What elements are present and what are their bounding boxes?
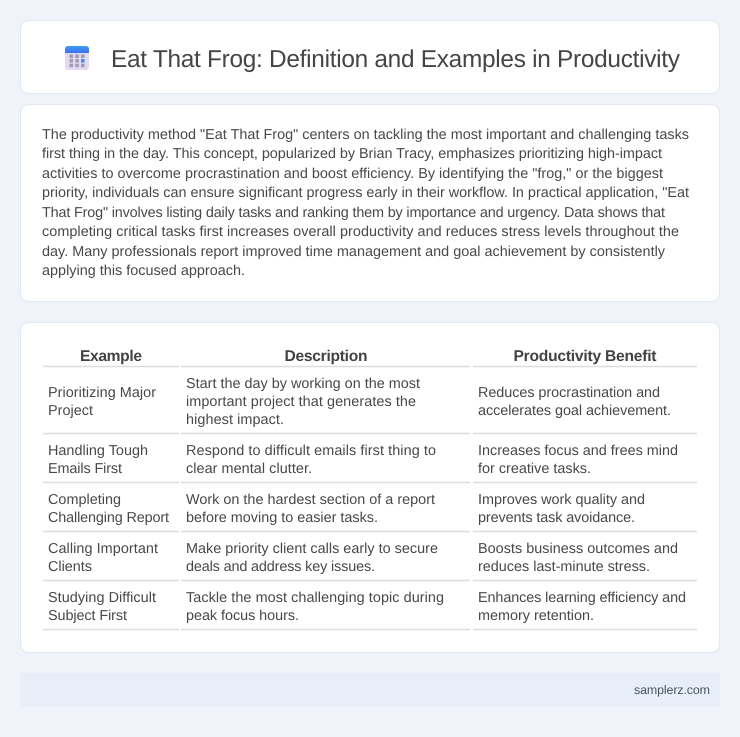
panel: intro text: That Frog" involves listing daily tasks and ranking them by importance and urgency. Data shows that (42, 205, 665, 221)
row: Prioritizing Major Project: Start the day by working on the most (186, 376, 420, 392)
panel: intro text: applying this focused approach. (42, 263, 245, 279)
panel: intro text: priority, individuals can ensure significant progress early in their workflow. In practical application, "Eat (42, 185, 689, 201)
row: Calling Important Clients: reduces last-minute stress. (478, 559, 650, 575)
panel: intro text (20, 104, 720, 302)
row: Completing Challenging Report (48, 492, 645, 526)
row: Prioritizing Major Project: Reduces procrastination and (478, 385, 660, 401)
panel: examples table (20, 322, 720, 652)
footer bar: samplerz.com (634, 683, 710, 697)
row: Prioritizing Major Project: important project that generates the (186, 394, 416, 410)
row: Calling Important Clients: Clients (48, 559, 92, 575)
row: Studying Difficult Subject First: Subject First (48, 608, 127, 624)
row: Handling Tough Emails First: Emails First (48, 461, 122, 477)
header panel (20, 20, 720, 94)
row: Calling Important Clients: Make priority client calls early to secure (186, 541, 438, 557)
row: Calling Important Clients: deals and address key issues. (186, 559, 375, 575)
row: Prioritizing Major Project: highest impact. (186, 412, 284, 428)
row: Completing Challenging Report: Completing (48, 492, 121, 508)
row: Completing Challenging Report: Work on the hardest section of a report (186, 492, 435, 508)
table header: Productivity Benefit (514, 348, 656, 365)
row: Completing Challenging Report: before moving to easier tasks. (186, 510, 378, 526)
panel: intro text: activities to overcome procrastination and boost efficiency. By identifying the "frog," or the biggest (42, 166, 663, 182)
footer bar (20, 673, 720, 707)
table header (80, 348, 656, 365)
icon: calendar (65, 46, 89, 70)
row: Studying Difficult Subject First: Enhances learning efficiency and (478, 590, 686, 606)
row: Prioritizing Major Project: Project (48, 403, 93, 419)
row: Handling Tough Emails First (48, 443, 678, 477)
panel: intro text: The productivity method "Eat That Frog" centers on tackling the most important and challenging tasks (42, 127, 689, 143)
row: Calling Important Clients (48, 541, 678, 575)
row: Completing Challenging Report: prevents task avoidance. (478, 510, 635, 526)
panel: intro text: first thing in the day. This concept, popularized by Brian Tracy, emphasizes prioritizing high-impact (42, 146, 662, 162)
row: Handling Tough Emails First: Handling Tough (48, 443, 148, 459)
row: Studying Difficult Subject First (48, 590, 686, 624)
row: Calling Important Clients: Calling Important (48, 541, 158, 557)
row: Completing Challenging Report: Improves work quality and (478, 492, 645, 508)
row: Prioritizing Major Project: Prioritizing Major (48, 385, 156, 401)
row: Studying Difficult Subject First: Tackle the most challenging topic during (186, 590, 444, 606)
row: Prioritizing Major Project: accelerates goal achievement. (478, 403, 671, 419)
row: Handling Tough Emails First: for creative tasks. (478, 461, 591, 477)
table header: Example (80, 348, 142, 365)
row: Studying Difficult Subject First: memory retention. (478, 608, 594, 624)
row: Prioritizing Major Project (48, 376, 671, 428)
row: Completing Challenging Report: Challenging Report (48, 510, 169, 526)
row: Handling Tough Emails First: Increases focus and frees mind (478, 443, 678, 459)
row: Calling Important Clients: Boosts business outcomes and (478, 541, 678, 557)
panel: intro text: completing critical tasks first increases overall productivity and reduces stress levels throughout the (42, 224, 679, 240)
row: Handling Tough Emails First: clear mental clutter. (186, 461, 312, 477)
row: Studying Difficult Subject First: Studying Difficult (48, 590, 156, 606)
panel: intro text: day. Many professionals report improved time management and goal achievement by consistently (42, 244, 666, 260)
row: Studying Difficult Subject First: peak focus hours. (186, 608, 299, 624)
row: Handling Tough Emails First: Respond to difficult emails first thing to (186, 443, 436, 459)
title: Eat That Frog: Definition and Examples in Productivity (111, 46, 681, 73)
table header: Description (284, 348, 368, 365)
